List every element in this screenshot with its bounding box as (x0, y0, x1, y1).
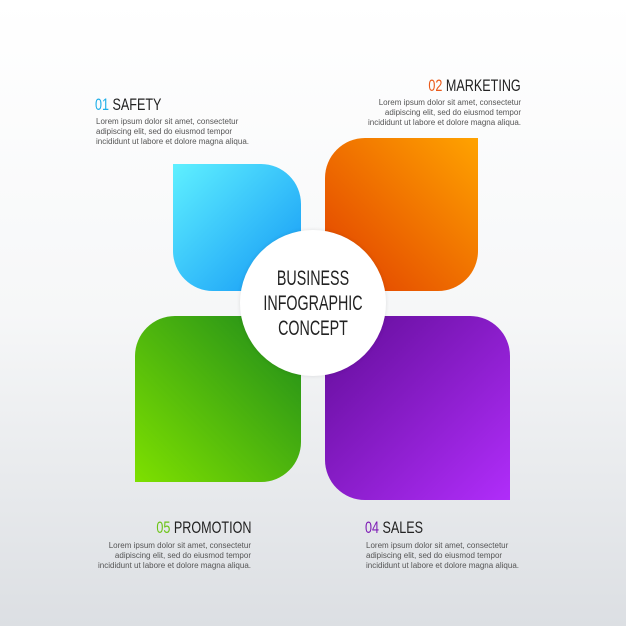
text block: marketing (368, 98, 521, 127)
text block: safety (96, 117, 249, 146)
text block: sales: adipiscing elit, sed do eiusmod tempor (366, 551, 502, 560)
text block: sales: incididunt ut labore et dolore magna aliqua. (366, 561, 519, 570)
text block: marketing: incididunt ut labore et dolore magna aliqua. (368, 118, 521, 127)
shape: purple petal (325, 316, 510, 500)
center title: BUSINESS (277, 267, 349, 290)
shape: orange petal (325, 138, 478, 291)
center title: INFOGRAPHIC (263, 292, 363, 315)
text block: safety: adipiscing elit, sed do eiusmod tempor (96, 127, 232, 136)
text block: marketing: adipiscing elit, sed do eiusmod tempor (385, 108, 521, 117)
text block: sales: Lorem ipsum dolor sit amet, consectetur (366, 541, 508, 550)
center title: CONCEPT (278, 317, 348, 340)
text block: promotion (98, 541, 251, 570)
heading: 02 marketing: 02 MARKETING (429, 76, 521, 95)
text block: sales (366, 541, 519, 570)
shape: green petal (135, 316, 301, 482)
center title (263, 267, 363, 340)
heading: 05 promotion: 05 PROMOTION (156, 518, 251, 537)
text block: safety: incididunt ut labore et dolore magna aliqua. (96, 137, 249, 146)
shape: blue petal (173, 164, 301, 291)
text block: marketing: Lorem ipsum dolor sit amet, consectetur (379, 98, 521, 107)
text block: safety: Lorem ipsum dolor sit amet, consectetur (96, 117, 238, 126)
text block: promotion: incididunt ut labore et dolore magna aliqua. (98, 561, 251, 570)
heading: 04 sales: 04 SALES (365, 518, 423, 537)
text block: promotion: Lorem ipsum dolor sit amet, consectetur (109, 541, 251, 550)
center circle (240, 230, 386, 376)
heading: 01 safety: 01 SAFETY (95, 95, 161, 114)
text block: promotion: adipiscing elit, sed do eiusmod tempor (115, 551, 251, 560)
